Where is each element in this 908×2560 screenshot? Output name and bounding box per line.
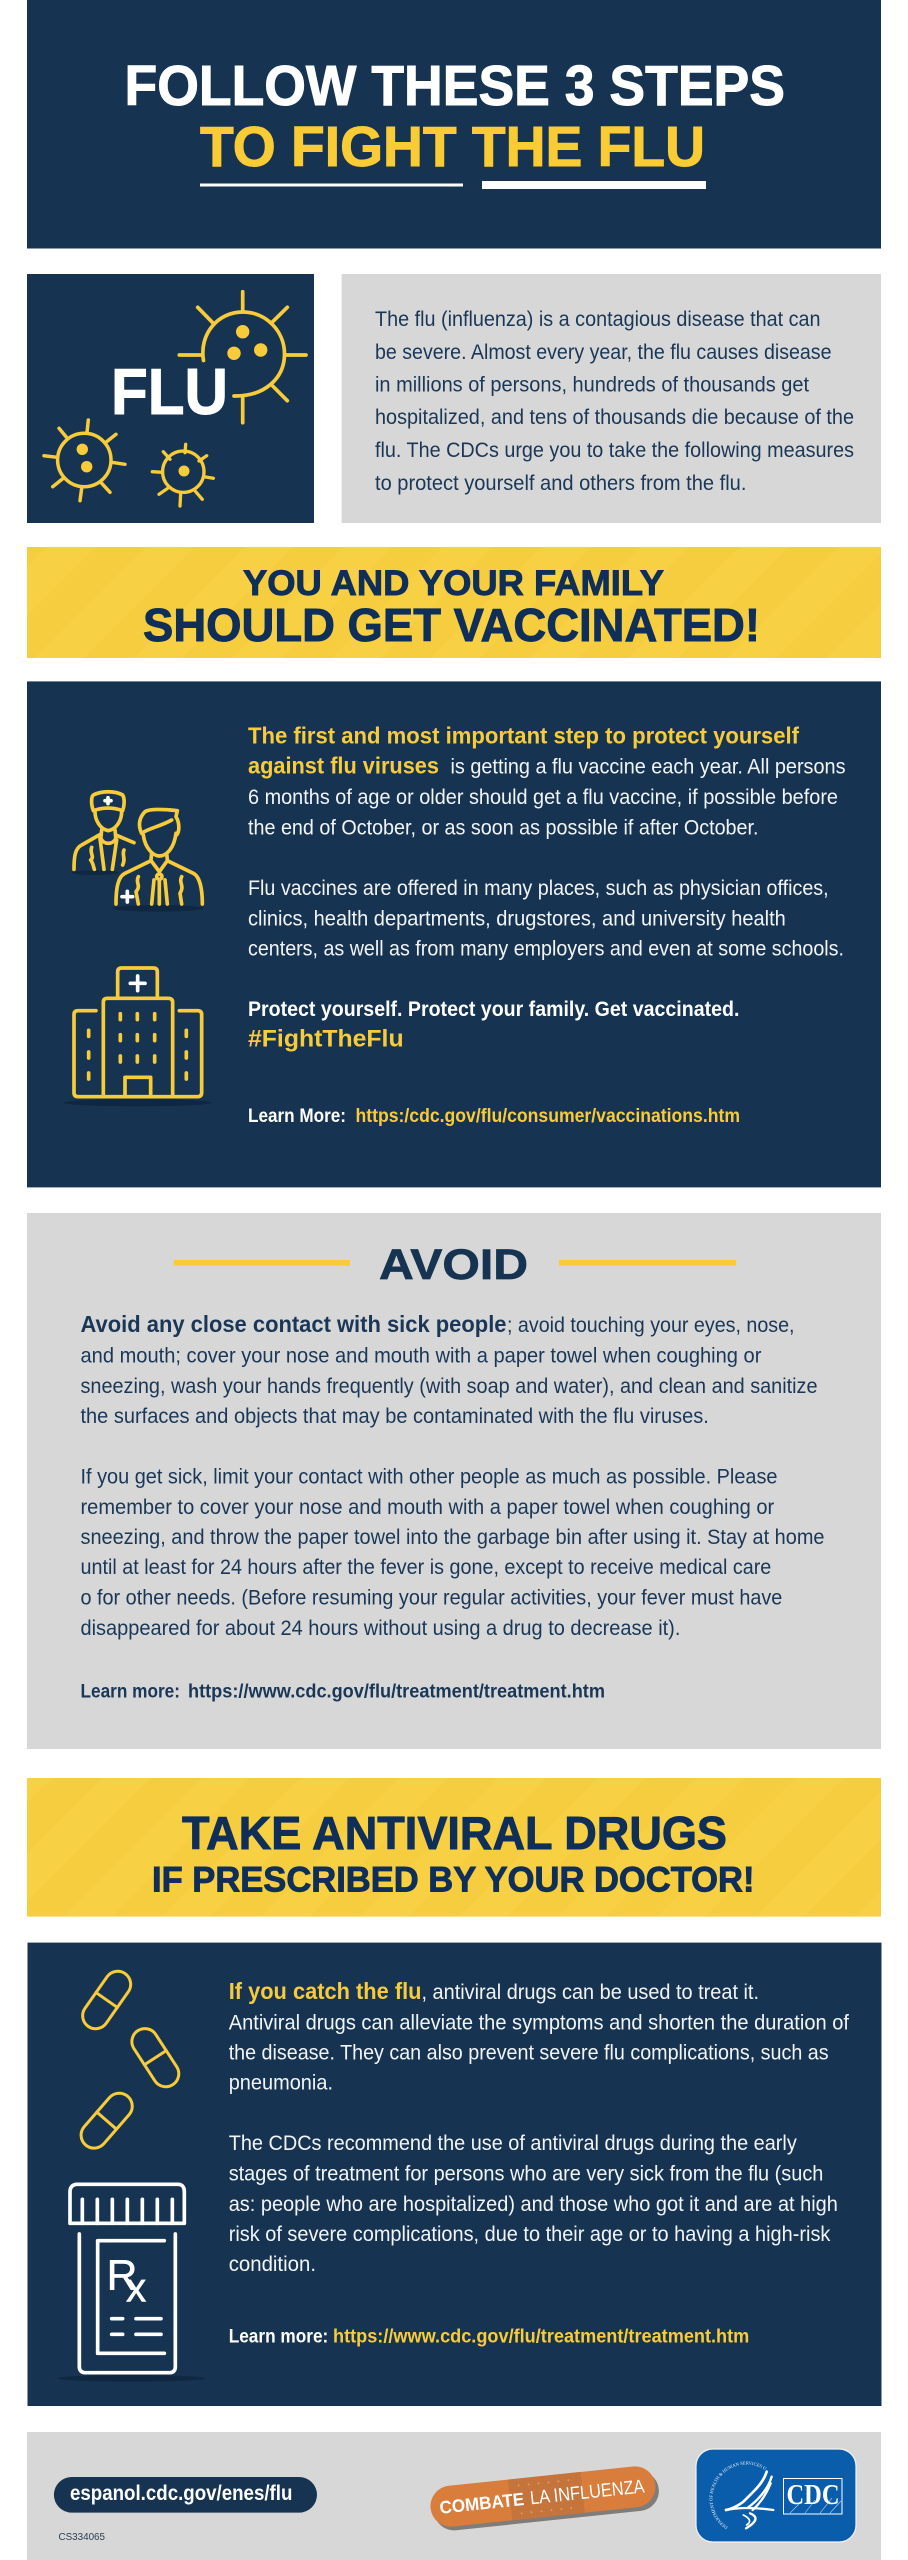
call to action: Protect yourself. Protect your family. Get vaccinated. (248, 998, 739, 1021)
avoid learn more link: Learn more: (80, 1682, 180, 1702)
avoid paragraph 2 (80, 1466, 824, 1640)
avoid paragraph 1 (80, 1311, 818, 1428)
website pill: espanol.cdc.gov/enes/flu (70, 2482, 292, 2505)
vaccination paragraph 1: 6 months of age or older should get a flu vaccine, if possible before (248, 786, 838, 809)
antiviral paragraph 1: Antiviral drugs can alleviate the symptoms and shorten the duration of (229, 2011, 849, 2034)
title line 1: FOLLOW THESE 3 STEPS (124, 54, 785, 118)
icon: medium virus (44, 420, 125, 501)
avoid heading (174, 1241, 736, 1289)
avoid paragraph 2: until at least for 24 hours after the fever is gone, except to receive medical care (80, 1556, 771, 1579)
antiviral learn more link: https://www.cdc.gov/flu/treatment/treatment.htm (333, 2327, 749, 2348)
panel: flu introduction (342, 274, 881, 523)
FLU label: FLU (111, 355, 228, 428)
hashtag: #FightTheFlu (248, 1025, 404, 1052)
vaccination paragraph 1 (248, 723, 846, 840)
icon: capsules (76, 1966, 184, 2153)
learn more link: https:/cdc.gov/flu/consumer/vaccinations.htm (356, 1106, 740, 1127)
avoid paragraph 1: Avoid any close contact with sick people (80, 1311, 506, 1337)
document code: CS334065 (58, 2532, 105, 2543)
intro text (375, 308, 854, 495)
banner heading line 2: IF PRESCRIBED BY YOUR DOCTOR! (152, 1860, 754, 1900)
title line 2: TO FIGHT THE FLU (200, 115, 705, 179)
antiviral paragraph 1: , antiviral drugs can be used to treat it. (422, 1981, 759, 2004)
avoid paragraph 2: disappeared for about 24 hours without using a drug to decrease it). (80, 1617, 680, 1640)
icon: large virus (179, 292, 306, 423)
banner heading line 1: TAKE ANTIVIRAL DRUGS (182, 1807, 727, 1859)
vaccination paragraph 2: centers, as well as from many employers and even at some schools. (248, 938, 844, 961)
avoid paragraph 1: sneezing, wash your hands frequently (with soap and water), and clean and sanitize (80, 1375, 818, 1398)
panel: avoid (27, 1213, 881, 1749)
icon: prescription bottle: R (107, 2251, 137, 2299)
banner heading line 1: YOU AND YOUR FAMILY (243, 564, 664, 603)
icon: prescription bottle (58, 2184, 206, 2382)
vaccination paragraph 2 (248, 877, 844, 961)
vaccination paragraph 2: clinics, health departments, drugstores, and university health (248, 907, 786, 930)
avoid paragraph 2: sneezing, and throw the paper towel into the garbage bin after using it. Stay at home (80, 1526, 824, 1549)
intro text: be severe. Almost every year, the flu causes disease (375, 341, 832, 364)
antiviral paragraph 2: stages of treatment for persons who are very sick from the flu (such (229, 2162, 823, 2185)
icon: small virus (152, 444, 213, 506)
avoid learn more link: https://www.cdc.gov/flu/treatment/treatment.htm (188, 1682, 605, 1702)
intro text: flu. The CDCs urge you to take the following measures (375, 439, 854, 462)
antiviral paragraph 2: The CDCs recommend the use of antiviral drugs during the early (229, 2132, 797, 2155)
antiviral paragraph 2: condition. (229, 2253, 316, 2276)
avoid paragraph 1: ; avoid touching your eyes, nose, (507, 1314, 794, 1337)
avoid paragraph 1: and mouth; cover your nose and mouth with a paper towel when coughing or (80, 1344, 761, 1368)
intro text: hospitalized, and tens of thousands die because of the (375, 406, 854, 429)
avoid heading: AVOID (379, 1241, 528, 1289)
learn more link: Learn More: (248, 1106, 346, 1127)
panel: antiviral treatment (28, 1943, 882, 2406)
avoid paragraph 2: o for other needs. (Before resuming your regular activities, your fever must have (80, 1587, 782, 1610)
bandage: combate la influenza (428, 2464, 661, 2533)
icon: hospital (64, 968, 212, 1106)
vaccination paragraph 1: against flu viruses (248, 753, 439, 779)
header panel (27, 0, 881, 248)
avoid paragraph 2: remember to cover your nose and mouth with a paper towel when coughing or (80, 1496, 774, 1519)
antiviral paragraph 2: risk of severe complications, due to their age or to having a high-risk (229, 2223, 831, 2246)
vaccination paragraph 1: the end of October, or as soon as possible if after October. (248, 817, 758, 840)
seal text: DEPARTMENT OF HEALTH & HUMAN SERVICES USA (709, 2462, 767, 2530)
intro text: The flu (influenza) is a contagious disease that can (375, 308, 820, 331)
bandage: combate la influenza: LA INFLUENZA (529, 2476, 646, 2509)
antiviral paragraph 1: pneumonia. (229, 2072, 333, 2095)
antiviral paragraph 1 (229, 1978, 849, 2095)
vaccination paragraph 1: The first and most important step to protect yourself (248, 723, 799, 749)
vaccination paragraph 1: is getting a flu vaccine each year. All persons (450, 756, 846, 779)
antiviral paragraph 1: If you catch the flu (229, 1978, 422, 2004)
title underlines (200, 181, 706, 189)
avoid paragraph 2: If you get sick, limit your contact with other people as much as possible. Please (80, 1466, 778, 1489)
banner: antiviral drugs (27, 1778, 881, 1917)
banner: get vaccinated (27, 547, 881, 658)
panel: flu icon (27, 274, 314, 523)
avoid paragraph 1: the surfaces and objects that may be contaminated with the flu viruses. (80, 1405, 709, 1428)
panel: vaccination (27, 681, 881, 1187)
CDC mark: CDC (786, 2479, 840, 2511)
antiviral paragraph 2 (229, 2132, 838, 2276)
antiviral paragraph 1: the disease. They can also prevent severe flu complications, such as (229, 2042, 829, 2064)
intro text: in millions of persons, hundreds of thousands get (375, 374, 809, 397)
icon: doctors (71, 792, 203, 912)
intro text: to protect yourself and others from the flu. (375, 472, 746, 495)
eagle emblem (726, 2472, 773, 2528)
icon: prescription bottle: x (126, 2265, 146, 2311)
vaccination paragraph 2: Flu vaccines are offered in many places, such as physician offices, (248, 877, 829, 900)
website pill (54, 2477, 317, 2513)
antiviral paragraph 2: as: people who are hospitalized) and those who got it and are at high (229, 2193, 838, 2216)
antiviral learn more link: Learn more: (229, 2327, 328, 2348)
banner heading line 2: SHOULD GET VACCINATED! (143, 599, 760, 651)
bandage: combate la influenza: COMBATE (439, 2489, 525, 2518)
